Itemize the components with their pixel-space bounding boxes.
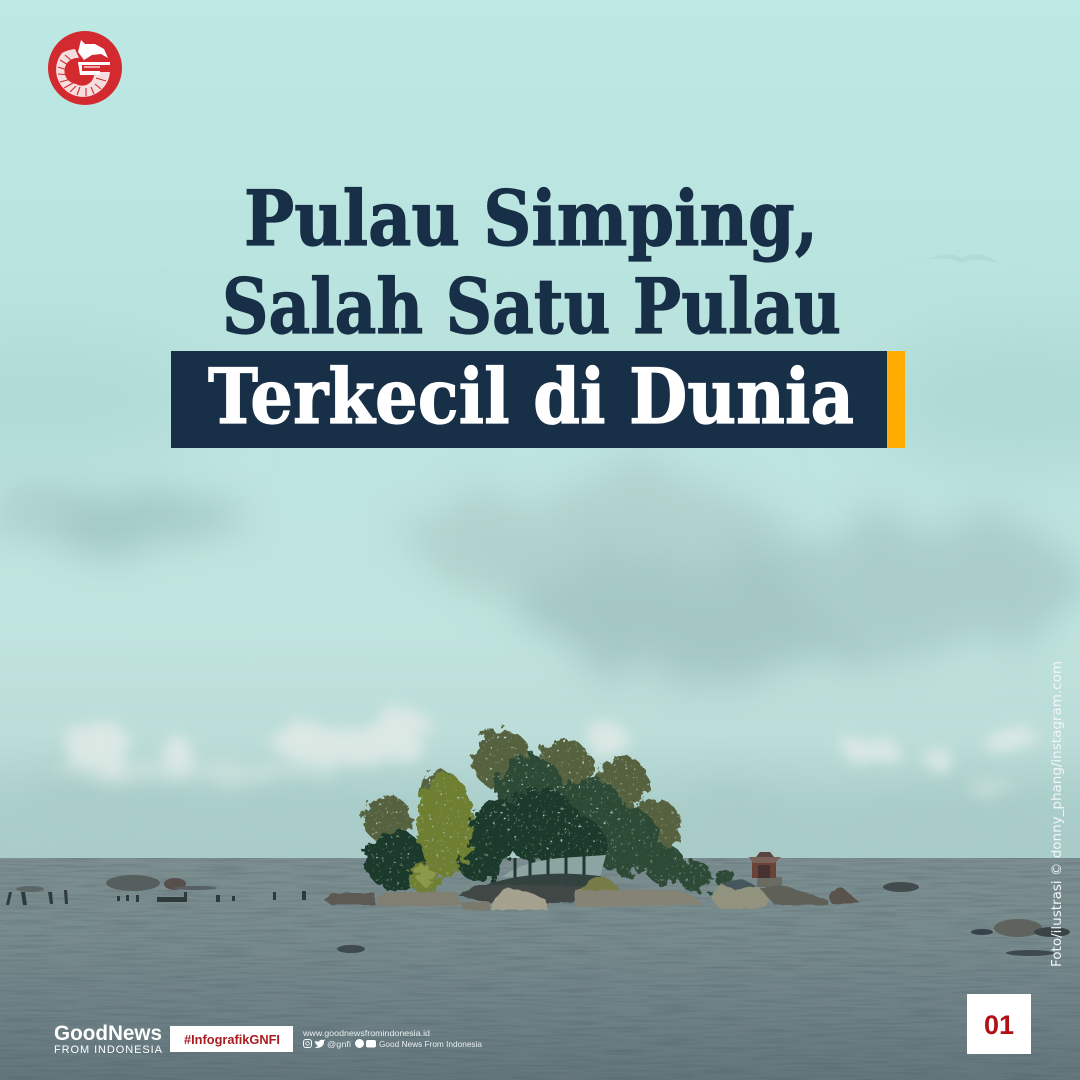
- website and social links: www.goodnewsfromindonesia.id: [302, 1028, 430, 1038]
- distant rocks left: [6, 875, 306, 905]
- brand: GoodNews From Indonesia: [54, 1022, 163, 1056]
- title line 1: Pulau Simping,: [244, 174, 818, 263]
- title: [171, 174, 905, 448]
- website and social links: @gnfi: [327, 1039, 351, 1049]
- distant bird: [926, 254, 1000, 264]
- emblem eagle head: [78, 40, 108, 60]
- clouds: soft grey bank: [0, 330, 1080, 840]
- island trees: [364, 730, 735, 894]
- page number: [967, 994, 1031, 1054]
- photo credit: Foto/ilustrasi © donny_phang/instagram.com: [1050, 661, 1065, 967]
- brand: GoodNews From Indonesia: FROM INDONESIA: [54, 1044, 163, 1056]
- rocks right and foreground: [337, 882, 1070, 956]
- shrine: [749, 852, 782, 887]
- title highlight bar: Terkecil di Dunia: [208, 352, 854, 441]
- brand: GoodNews From Indonesia: GoodNews: [54, 1022, 162, 1045]
- website and social links: Good News From Indonesia: [379, 1039, 482, 1049]
- emblem ring: [56, 49, 110, 97]
- clouds: white cumulus: [50, 711, 1040, 798]
- logo: red Garuda emblem: [48, 31, 122, 105]
- gap of light under trees: [480, 855, 620, 890]
- page number: 01: [984, 1010, 1014, 1040]
- hashtag badge: [170, 1026, 293, 1052]
- sea: [0, 858, 1080, 1080]
- social icons: [304, 1039, 376, 1048]
- island: [324, 730, 860, 910]
- website and social links: [302, 1028, 482, 1049]
- title line 2: Salah Satu Pulau: [222, 262, 841, 351]
- emblem G bar: [78, 62, 110, 75]
- island rocks: [324, 877, 860, 910]
- hashtag badge: #InfografikGNFI: [184, 1033, 280, 1047]
